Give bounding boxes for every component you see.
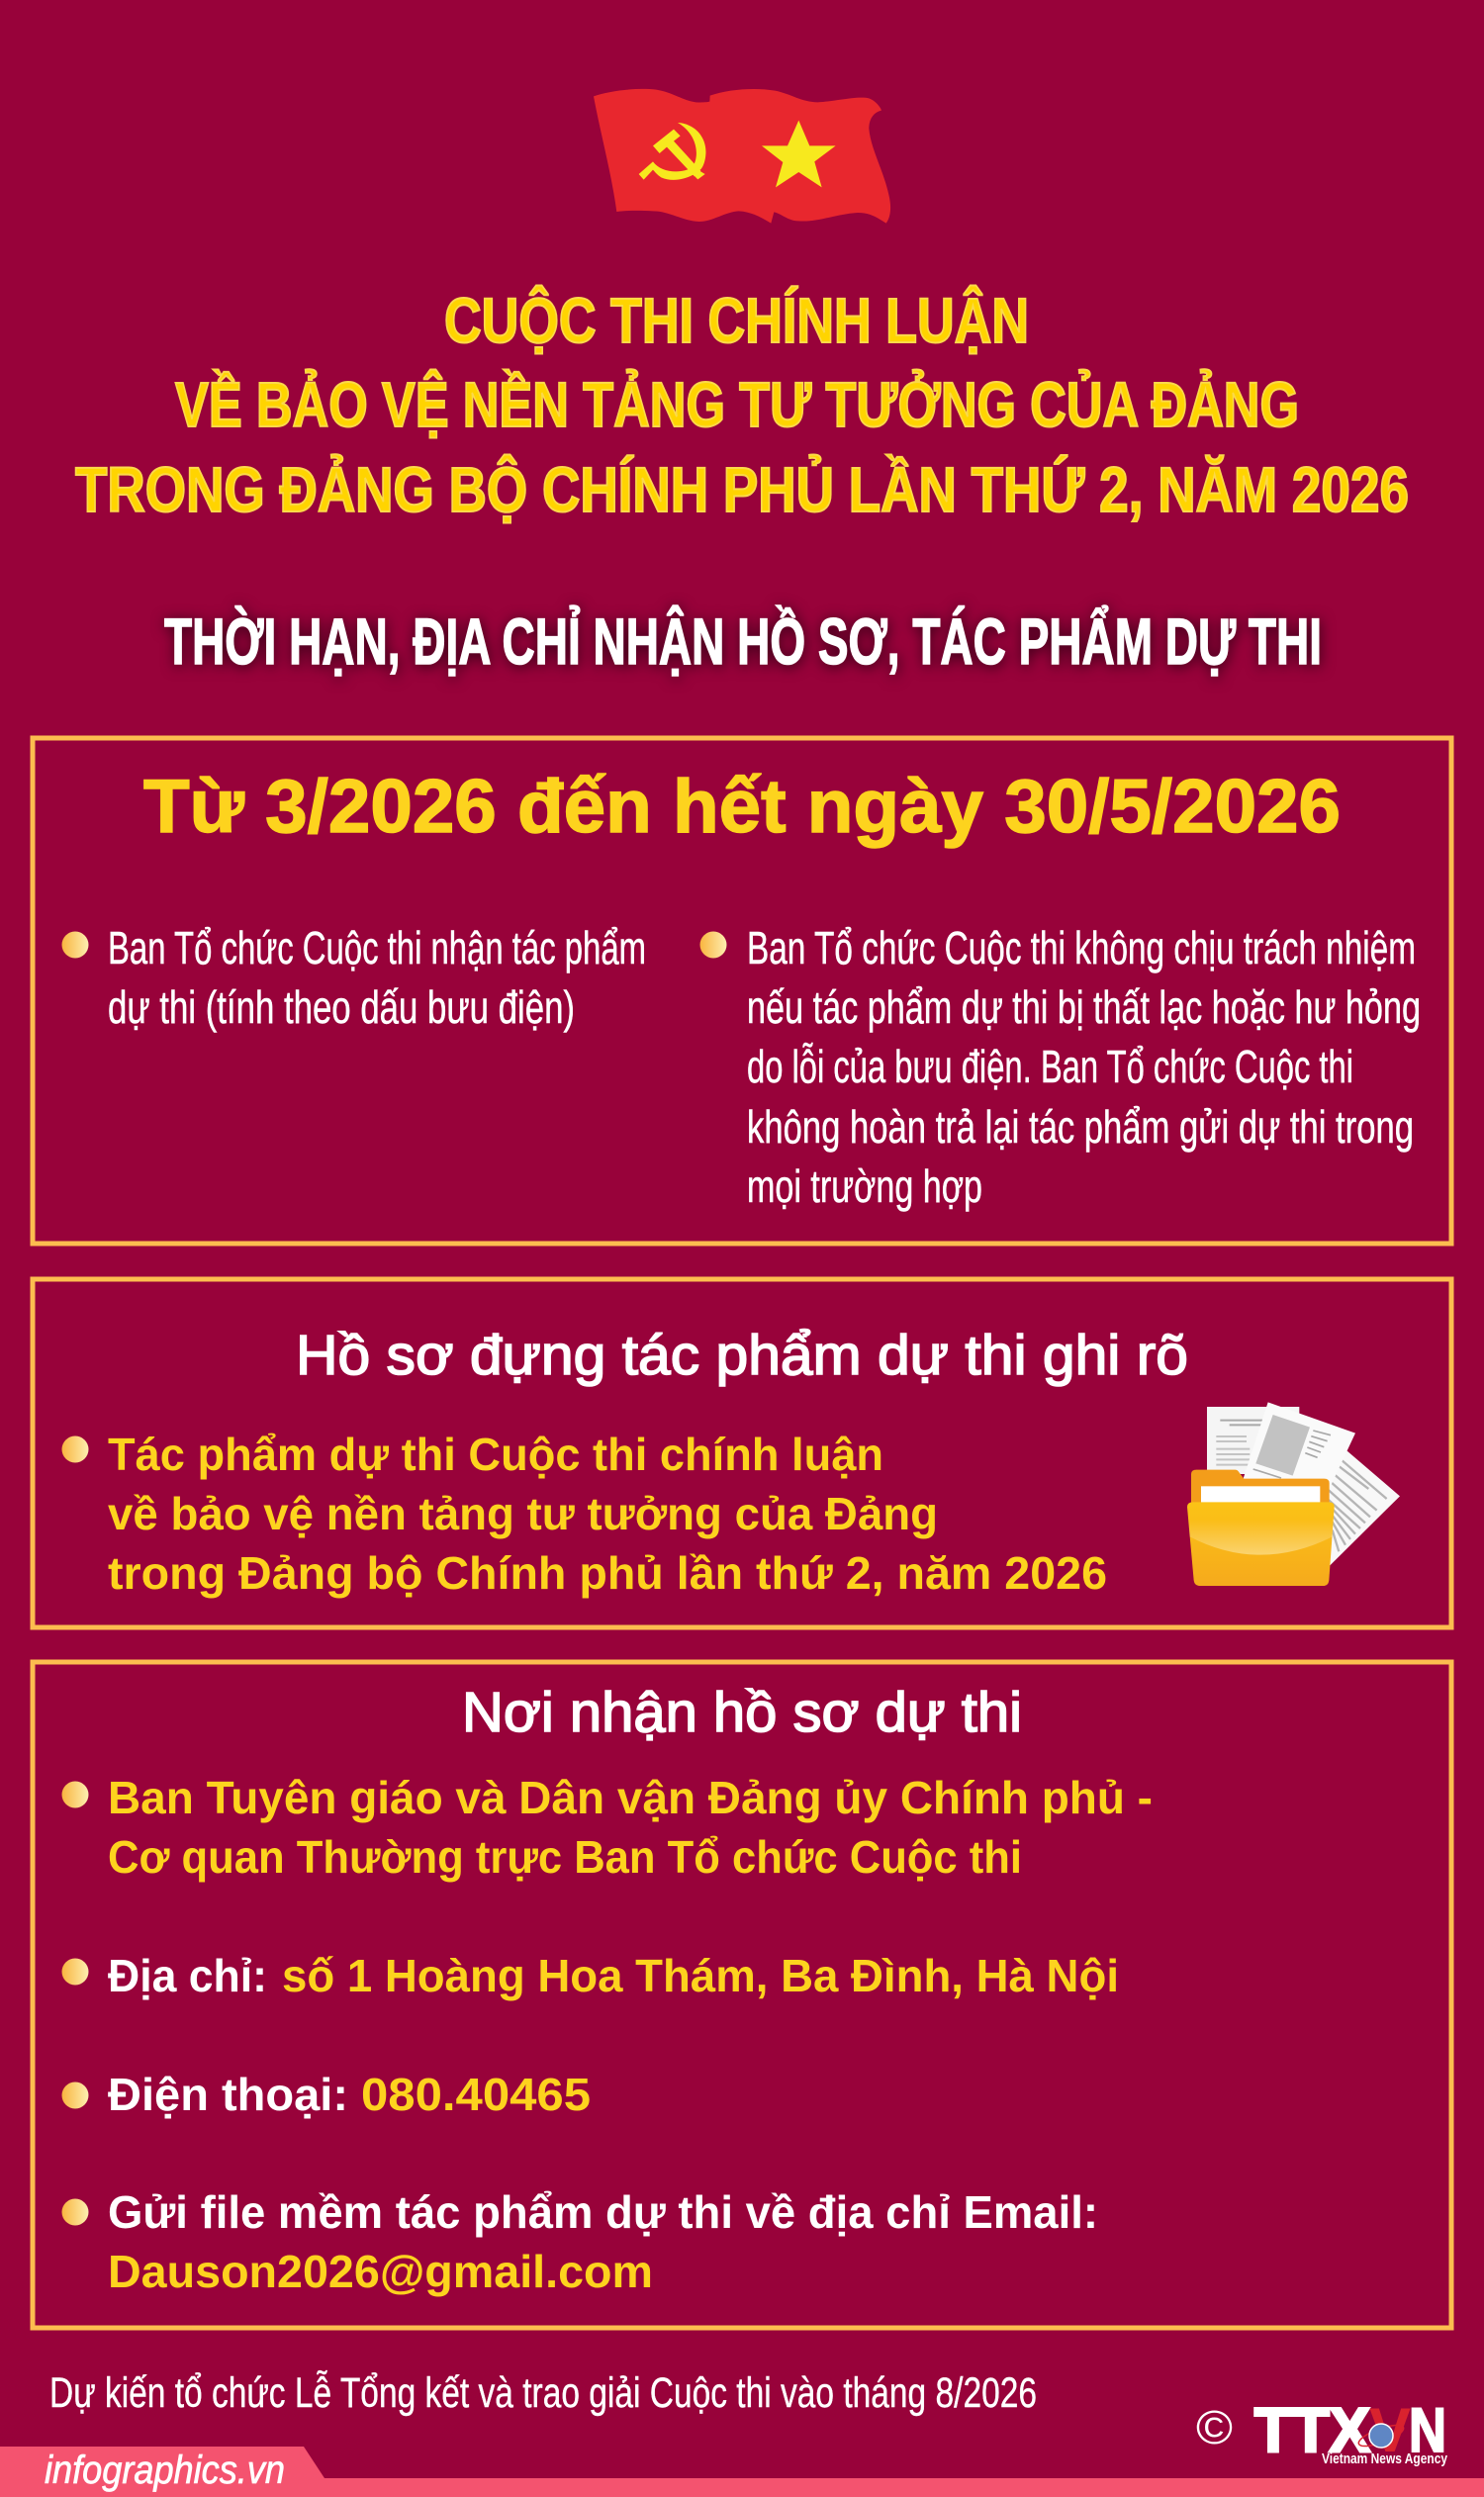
footer note: Dự kiến tổ chức Lễ Tổng kết và trao giải Cuộc thi vào tháng 8/2026 [49, 2369, 1037, 2417]
bullet: address: Địa chỉ: [108, 1950, 267, 2001]
bullet: receiving office: Cơ quan Thường trực Ban Tổ chức Cuộc thi [108, 1831, 1022, 1883]
bullet: receiving office: Ban Tuyên giáo và Dân vận Đảng ủy Chính phủ - [108, 1772, 1153, 1823]
bullet: envelope text: Tác phẩm dự thi Cuộc thi chính luận [108, 1429, 883, 1480]
panel: envelope label [33, 1279, 1451, 1627]
bullet: receiving works: dự thi (tính theo dấu bưu điện) [108, 981, 575, 1033]
bullet: phone: Điện thoại: [108, 2069, 348, 2120]
bullet: phone [61, 2069, 591, 2120]
copyright and agency logo: TTX [1254, 2396, 1370, 2465]
bullet: envelope text: về bảo vệ nền tảng tư tưởng của Đảng [108, 1488, 938, 1539]
footer band: infographics.vn [0, 2447, 1484, 2497]
title: CUỘC THI CHÍNH LUẬN [444, 284, 1029, 356]
copyright and agency logo: © [1196, 2402, 1233, 2454]
icon: party and national flag [594, 89, 890, 224]
bullet: email [61, 2186, 1098, 2297]
copyright and agency logo: N [1409, 2396, 1446, 2465]
copyright and agency logo [1196, 2396, 1448, 2467]
panel: deadline [33, 738, 1451, 1244]
bullet: address: số 1 Hoàng Hoa Thám, Ba Đình, Hà Nội [282, 1950, 1119, 2001]
footer band: infographics.vn: infographics.vn [45, 2449, 285, 2492]
envelope heading: Hồ sơ đựng tác phẩm dự thi ghi rõ [296, 1324, 1188, 1387]
panel: where to submit [33, 1662, 1451, 2328]
bullet: responsibility: mọi trường hợp [747, 1160, 982, 1212]
bullet: email: Dauson2026@gmail.com [108, 2246, 653, 2297]
bullet: receiving works [61, 922, 646, 1033]
bullet: receiving works: Ban Tổ chức Cuộc thi nhận tác phẩm [108, 922, 646, 973]
deadline heading: Từ 3/2026 đến hết ngày 30/5/2026 [143, 765, 1341, 849]
bullet: receiving office [61, 1772, 1153, 1883]
bullet: envelope text [61, 1429, 1107, 1599]
copyright and agency logo: Vietnam News Agency [1322, 2451, 1448, 2467]
bullet: responsibility [700, 922, 1421, 1212]
title [75, 284, 1409, 525]
bullet: email: Gửi file mềm tác phẩm dự thi về địa chỉ Email: [108, 2186, 1098, 2238]
submission heading: Nơi nhận hồ sơ dự thi [462, 1681, 1022, 1744]
copyright and agency logo: V [1369, 2396, 1411, 2465]
bullet: phone: 080.40465 [361, 2069, 591, 2120]
icon: folder with documents [1187, 1402, 1400, 1586]
bullet: envelope text: trong Đảng bộ Chính phủ lần thứ 2, năm 2026 [108, 1547, 1107, 1599]
